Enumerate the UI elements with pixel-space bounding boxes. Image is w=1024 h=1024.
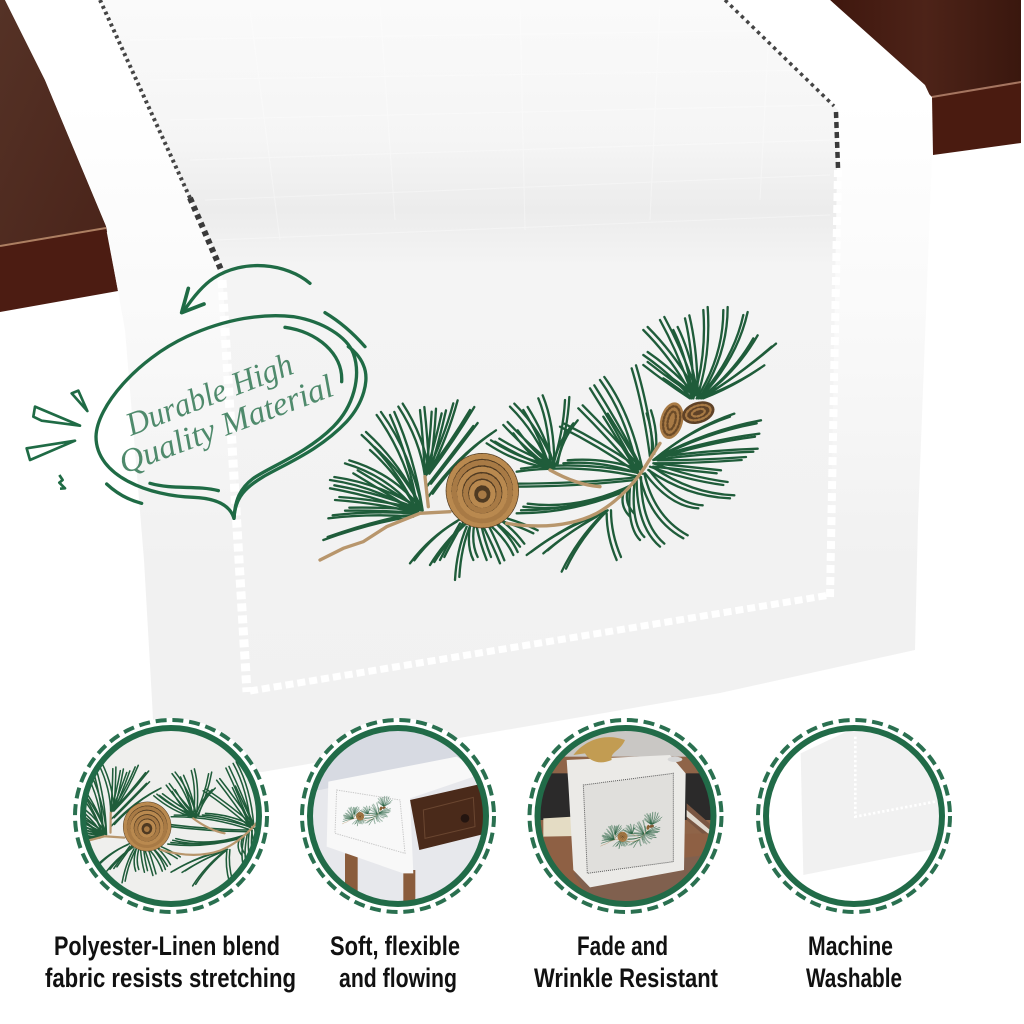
feature 2 caption: and flowing: [339, 963, 457, 993]
hemstitch line: [100, 0, 838, 692]
callout text: Durable High: [120, 347, 298, 444]
feature 3: runner on dining table: [528, 717, 724, 914]
speech bubble outline: [96, 313, 366, 518]
curved arrow: [182, 266, 310, 313]
feature 1 caption: Polyester-Linen blend: [54, 931, 280, 961]
feature 3 caption: [534, 931, 718, 993]
table right: [830, 0, 1021, 155]
pine branch embroidery: [320, 307, 776, 580]
feature 3 caption: Wrinkle Resistant: [534, 963, 718, 993]
feature 2 caption: [330, 931, 460, 993]
callout text: Quality Material: [114, 369, 338, 481]
table runner cloth: [5, 0, 932, 772]
feature 4 caption: [806, 931, 902, 993]
feature 1 caption: [45, 931, 296, 993]
feature 2 caption: Soft, flexible: [330, 931, 460, 961]
table left: [0, 0, 118, 312]
callout: durable high quality material: [27, 266, 366, 518]
feature 1 caption: fabric resists stretching: [45, 963, 296, 993]
large pine cone: [446, 453, 519, 528]
burst marks: [27, 391, 87, 489]
pine needles: [323, 307, 776, 580]
feature 4 caption: Machine: [808, 931, 893, 961]
feature 3 caption: Fade and: [577, 931, 668, 961]
feature 4 caption: Washable: [806, 963, 902, 993]
feature 2: runner on console table: [300, 718, 500, 920]
feature 1: embroidery close-up: [73, 718, 269, 914]
branch stems: [320, 443, 660, 560]
small pine cones: [656, 397, 717, 442]
feature 4: fabric corner: [756, 718, 952, 914]
